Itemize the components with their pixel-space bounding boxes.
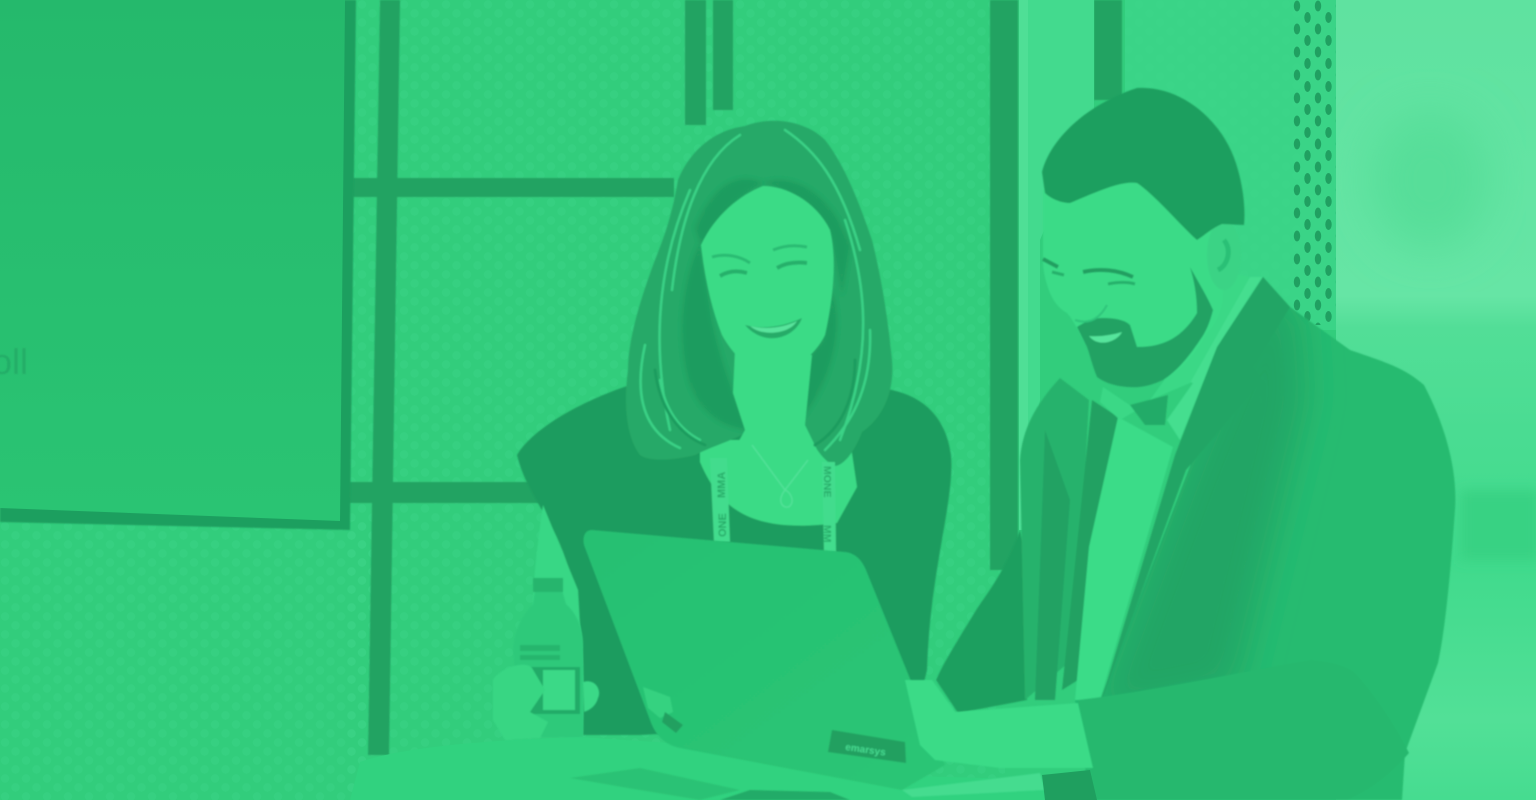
woman: lanyard right: [821, 462, 836, 552]
man: nose shadow: [1075, 305, 1107, 322]
woman: neck: [725, 350, 825, 466]
bottle: cap: [533, 578, 563, 592]
man: hair: [1042, 88, 1244, 240]
man: brows and eyes: [1043, 259, 1135, 284]
man: smile: [1089, 332, 1122, 343]
background: dark window frame bars: [348, 0, 1122, 755]
bottle: bands: [520, 645, 560, 651]
background: perforated dark strip: [1293, 0, 1336, 325]
woman: lanyard left: MMA: [716, 472, 728, 498]
man: [936, 88, 1455, 800]
thumb: [583, 681, 599, 712]
woman: lanyard left: [710, 458, 730, 542]
laptop: sticker: [828, 730, 906, 763]
woman: face: [701, 186, 834, 374]
woman: necklace: [752, 445, 808, 507]
man: lapel: [1100, 277, 1290, 705]
laptop: lid: [583, 530, 945, 790]
man: beard: [1077, 267, 1213, 387]
laptop: shadow underneath: [720, 790, 850, 800]
man: collar: [1100, 277, 1262, 440]
woman: lanyard left: ONE: [717, 513, 729, 537]
table top: [350, 737, 1050, 800]
woman: eyes, brows and smile: [712, 246, 807, 338]
woman: black top: [517, 385, 951, 735]
man: ear: [1207, 220, 1241, 290]
table papers: [570, 768, 740, 800]
woman: arm: [532, 505, 582, 660]
bottle: label: [526, 667, 580, 714]
man: jacket: [1075, 277, 1455, 800]
man: jacket left panel: [1020, 378, 1089, 700]
water bottle and hand: [493, 578, 599, 740]
man: shirt cuff shadow: [1042, 770, 1097, 800]
man: shirt: [1075, 417, 1173, 700]
background: pale column beside the man: [1019, 0, 1094, 530]
woman: lanyard right: MONE: [821, 466, 833, 498]
man: sleeve behind: [936, 530, 1027, 713]
woman: hair shadows: [682, 243, 750, 430]
laptop: base: [902, 773, 1045, 797]
laptop: [583, 530, 1045, 800]
background: bright window at right: [1336, 0, 1536, 800]
wall screen at left: [0, 0, 356, 530]
man: face: [1043, 170, 1225, 387]
woman: chest: [700, 440, 857, 526]
man: neck: [1150, 270, 1250, 400]
woman: hair mass: [626, 121, 892, 466]
hand holding bottle: [493, 665, 548, 740]
man: hand on keyboard: [905, 680, 1093, 768]
man: dark strip by shirt: [1062, 400, 1118, 690]
laptop: sticker: emarsys: [845, 742, 887, 759]
woman: hair strands: [641, 130, 870, 450]
woman: lanyard right: MM: [821, 525, 833, 543]
bottle: body: [513, 590, 583, 737]
man: jacket front shadow: [1104, 308, 1309, 696]
laptop: small sticker: [643, 687, 683, 733]
woman: [517, 121, 951, 735]
man: lower sleeve: [1078, 660, 1409, 800]
